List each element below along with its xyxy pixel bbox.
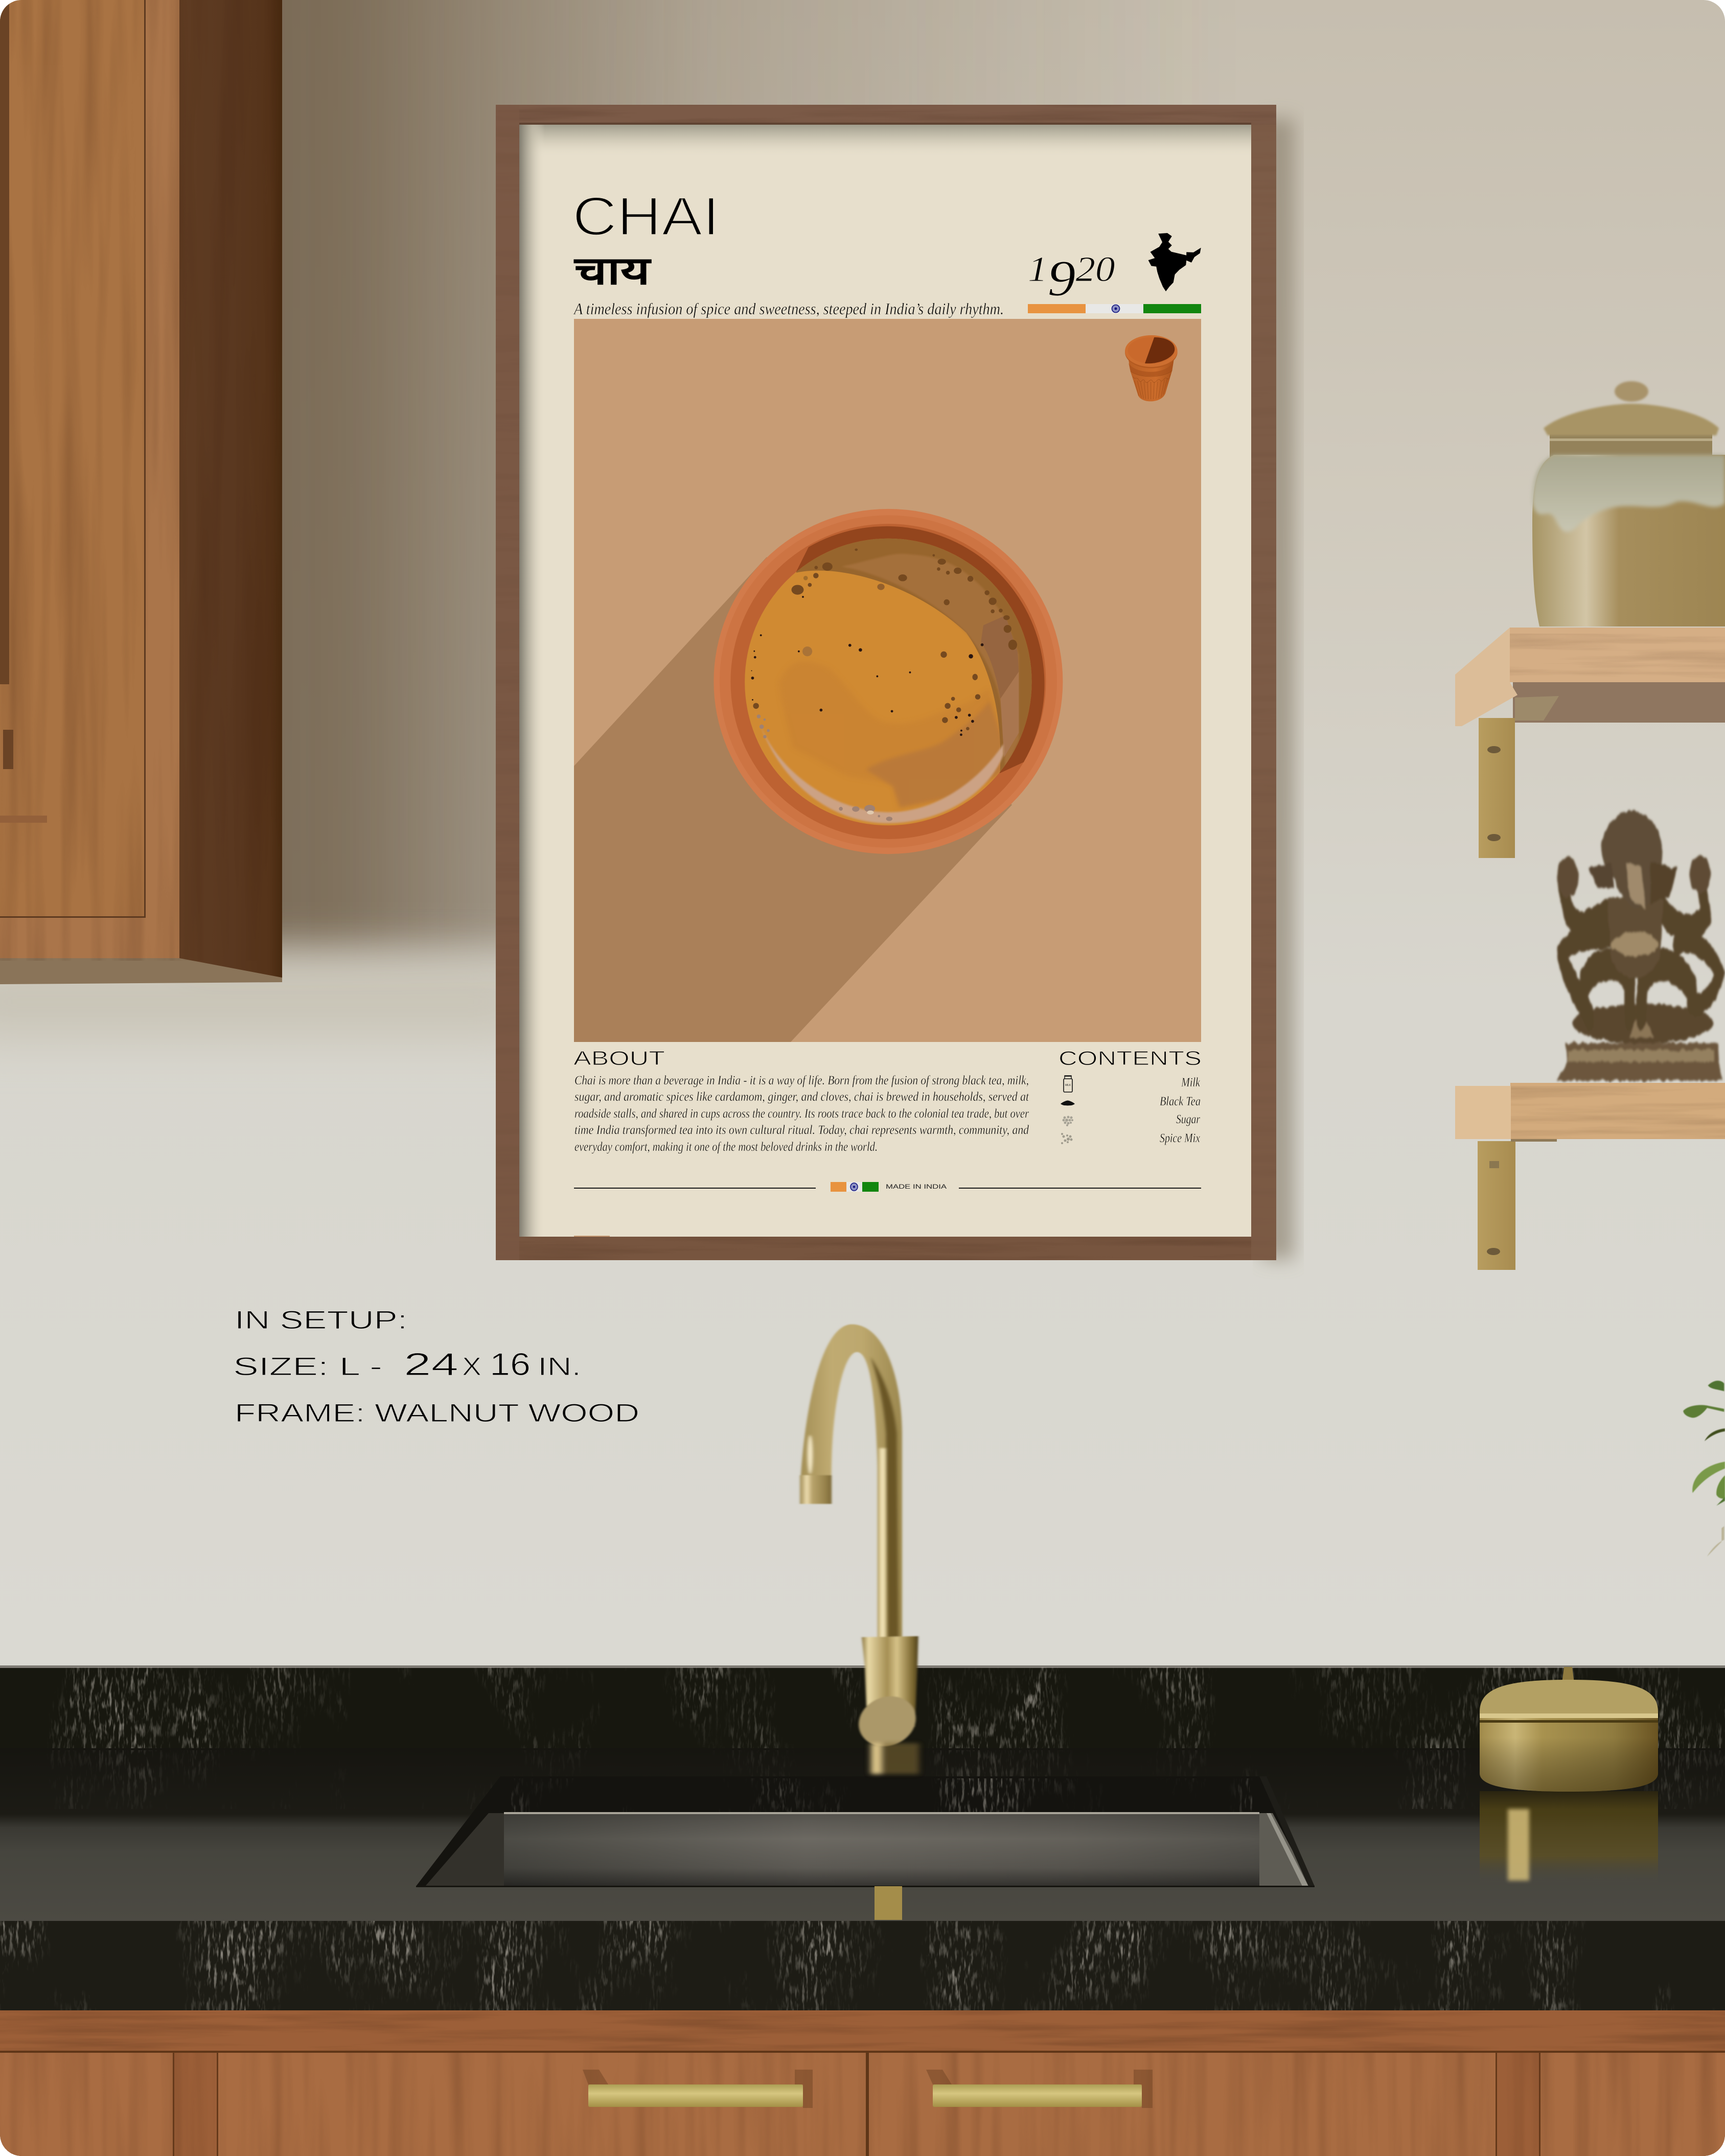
icon: milk bottle: MILK <box>1065 1084 1071 1087</box>
hindi title: चाय <box>573 249 652 292</box>
plant leaves <box>1683 1381 1725 1557</box>
icon: spice mix <box>1061 1133 1072 1144</box>
setup info text: SIZE: L - <box>233 1352 382 1381</box>
jar knob <box>1615 381 1648 402</box>
setup info text: 24 <box>404 1347 458 1382</box>
title: CHAI <box>572 186 720 247</box>
icon: milk bottle <box>1064 1076 1072 1092</box>
backsplash <box>0 1667 1725 1749</box>
sink <box>416 1776 1315 1887</box>
upper wood cabinet <box>0 0 282 984</box>
lotus seat <box>1573 1004 1713 1044</box>
wood grain <box>0 0 282 961</box>
jar lid <box>1544 404 1719 435</box>
about heading: ABOUT <box>573 1048 665 1070</box>
footer <box>574 1182 1201 1192</box>
sink left wall <box>425 1813 504 1886</box>
sink back wall stone <box>511 1778 1252 1812</box>
setup info text: IN. <box>538 1352 581 1381</box>
cabinet underside <box>0 956 282 984</box>
contents list <box>1061 1076 1201 1145</box>
about text block: roadside stalls, and shared in cups across the country. Its roots trace back to the colonial tea trade, but over <box>574 1107 1029 1121</box>
counter front edge <box>0 1921 1725 2010</box>
faucet collar <box>862 1636 918 1727</box>
icon: india map <box>1148 233 1201 291</box>
flag bar <box>1028 304 1201 313</box>
shelf front <box>1510 1083 1725 1139</box>
about text block: Chai is more than a beverage in India - it is a way of life. Born from the fusion of strong black tea, milk, <box>574 1074 1029 1087</box>
shelf bracket <box>1479 696 1559 858</box>
cabinet side <box>179 0 282 978</box>
wall background <box>0 0 1725 1671</box>
paper inner shadow <box>519 125 1251 1237</box>
handle left <box>583 2070 813 2108</box>
tea surface <box>739 532 1045 838</box>
ganesha statue <box>1557 810 1722 1080</box>
statue hands <box>1557 857 1579 897</box>
tea shaded area <box>796 532 1045 773</box>
statue base <box>1557 1043 1722 1080</box>
about text block: everyday comfort, making it one of the most beloved drinks in the world. <box>574 1140 878 1154</box>
door recess <box>0 0 9 684</box>
icon: black tea pile <box>1061 1101 1075 1106</box>
about text block: sugar, and aromatic spices like cardamom, ginger, and cloves, chai is brewed in households, served at <box>574 1090 1029 1104</box>
sugar label: Sugar <box>1176 1112 1200 1126</box>
setup info text: 16 <box>490 1347 531 1382</box>
faucet base reflection <box>870 1743 919 1774</box>
year: 9 <box>1048 250 1076 307</box>
year: 20 <box>1076 249 1115 289</box>
black tea label: Black Tea <box>1160 1095 1201 1108</box>
setup info text <box>233 1306 639 1427</box>
spout highlight <box>808 1435 813 1474</box>
canister knob <box>1561 1667 1575 1691</box>
jar glaze <box>1532 455 1725 532</box>
granite counter and backsplash <box>0 1665 1725 2010</box>
frame shadow on wall <box>1262 119 1294 1259</box>
icon: small clay cup <box>1125 335 1178 401</box>
jar body <box>1532 455 1725 627</box>
spout tip <box>800 1475 832 1504</box>
walnut frame <box>496 105 1276 1260</box>
lower shelf <box>1455 1083 1725 1270</box>
year: 1 <box>1028 249 1048 289</box>
shelf bracket <box>1478 1139 1557 1270</box>
ceramic jar <box>1532 381 1725 627</box>
cabinet doors <box>0 2052 1725 2156</box>
statue torso <box>1607 897 1664 978</box>
icon: sugar <box>1062 1116 1073 1126</box>
illustration panel <box>574 319 1201 1042</box>
statue head <box>1601 810 1663 908</box>
subtitle: A timeless infusion of spice and sweetness, steeped in India’s daily rhythm. <box>573 299 1004 318</box>
poster paper <box>519 125 1251 1237</box>
tea bubbles <box>753 548 1017 730</box>
brass canister <box>1480 1667 1658 1884</box>
brass faucet <box>800 1324 919 1774</box>
door notch <box>3 730 13 769</box>
shelf front <box>1510 628 1725 682</box>
sink basin steel <box>504 1813 1259 1886</box>
canister body <box>1480 1718 1658 1792</box>
contents heading: CONTENTS <box>1059 1048 1202 1070</box>
counter trim <box>0 2010 1725 2156</box>
handle right <box>926 2070 1153 2108</box>
sink right wall <box>1259 1813 1312 1886</box>
setup info text: FRAME: WALNUT WOOD <box>235 1399 639 1427</box>
made in india label: MADE IN INDIA <box>886 1183 947 1190</box>
large chai cup top view <box>714 509 1063 854</box>
faucet reflection <box>875 1886 902 1920</box>
footer flag <box>831 1182 879 1192</box>
setup info text: IN SETUP: <box>235 1306 407 1334</box>
poster in walnut frame <box>496 105 1276 1260</box>
canister reflection <box>1480 1791 1658 1884</box>
inner wall <box>730 524 1046 839</box>
shelf end <box>1455 1086 1511 1139</box>
shaded inner wall <box>795 526 1045 773</box>
cabinet frame rail <box>0 0 179 958</box>
faucet spout <box>801 1324 902 1639</box>
canister lid <box>1480 1680 1658 1718</box>
clay rim <box>714 509 1063 854</box>
shelf underside shadow <box>1513 682 1725 723</box>
milk highlight crescent <box>755 708 1003 823</box>
shelf side <box>1455 628 1517 726</box>
milk label: Milk <box>1181 1076 1201 1089</box>
counter surface <box>0 1748 1725 1921</box>
about text block <box>574 1074 1029 1154</box>
tea darker mottling <box>779 661 1003 808</box>
setup info text: X <box>462 1352 481 1381</box>
door ledge <box>0 816 47 823</box>
upper shelf with jar <box>1455 381 1725 858</box>
faucet stem highlight <box>880 1448 886 1639</box>
about text block: time India transformed tea into its own cultural ritual. Today, chai represents warmth, community, and <box>574 1123 1029 1137</box>
cabinet door panel <box>0 0 145 917</box>
lower wood cabinets <box>0 2010 1725 2156</box>
statue limbs <box>1560 880 1720 1018</box>
jar neck <box>1550 432 1712 457</box>
spice mix label: Spice Mix <box>1160 1131 1200 1145</box>
faucet lever <box>858 1693 917 1750</box>
long cup shadow <box>574 557 1012 1042</box>
